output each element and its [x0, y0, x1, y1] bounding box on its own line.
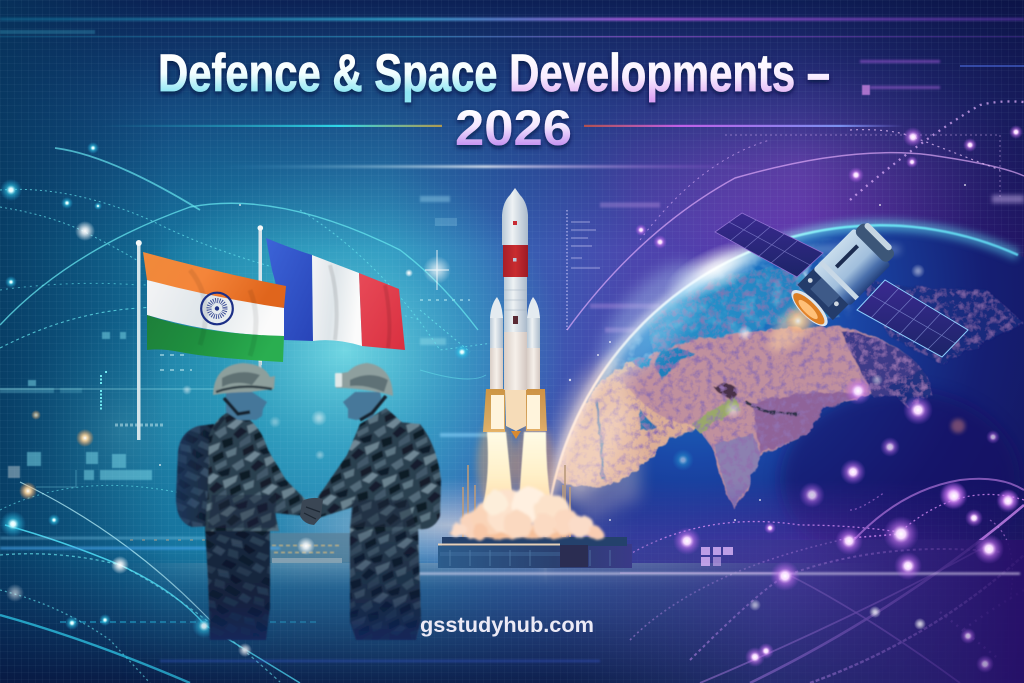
- satellite: [715, 213, 968, 359]
- Ashoka Chakra: [201, 293, 233, 324]
- engine glow frames: [483, 389, 547, 439]
- sparkle dots: [159, 184, 966, 521]
- France flag pole: [258, 225, 263, 372]
- circuit arcs: left teal network: [0, 148, 515, 683]
- torso and arm: [318, 408, 418, 531]
- Indian flag: [143, 252, 286, 362]
- exhaust glow: [761, 291, 829, 359]
- left booster: [490, 297, 503, 389]
- right soldier: [318, 363, 441, 640]
- India flag pole: [136, 240, 142, 440]
- body: [785, 218, 901, 334]
- legs: [350, 527, 421, 640]
- website label: gsstudyhub.com: [420, 614, 594, 637]
- decorative data readouts: [0, 30, 1024, 487]
- circuit arcs: right purple network: [567, 101, 1024, 683]
- handshake: [300, 498, 323, 525]
- head and helmet: [213, 363, 275, 420]
- head and helmet: [335, 363, 393, 420]
- title line 2: year with flanking rules: 2026: [455, 100, 572, 156]
- launch platform: [438, 537, 632, 568]
- launch gantry towers: [463, 465, 570, 537]
- left solar panel: [715, 213, 823, 277]
- right solar panel: [857, 280, 968, 357]
- globe: earth with India and Arabia: [544, 214, 1024, 572]
- atmosphere rim: [545, 225, 1018, 600]
- rocket: [483, 188, 547, 439]
- glowing nodes: left network: [0, 142, 470, 657]
- title line 1: Defence & Space Developments –: [158, 44, 830, 103]
- exhaust smoke cloud: [448, 487, 602, 540]
- city light nodes on globe: [672, 264, 1019, 511]
- landmass: continents: [552, 268, 1024, 508]
- rocket flames: [477, 420, 554, 510]
- ground plane and harbour: [0, 533, 1024, 683]
- French flag: [266, 238, 405, 350]
- right booster: [527, 297, 540, 389]
- core stage: [502, 188, 528, 390]
- backpack: [390, 422, 441, 529]
- backpack: [176, 424, 216, 527]
- legs: [205, 527, 270, 640]
- torso and arm: [205, 412, 306, 531]
- horizontal header light lines: [0, 18, 1024, 168]
- left soldier: [176, 363, 306, 640]
- glowing nodes: right network: [635, 125, 1023, 673]
- globe glow highlight: [534, 227, 774, 511]
